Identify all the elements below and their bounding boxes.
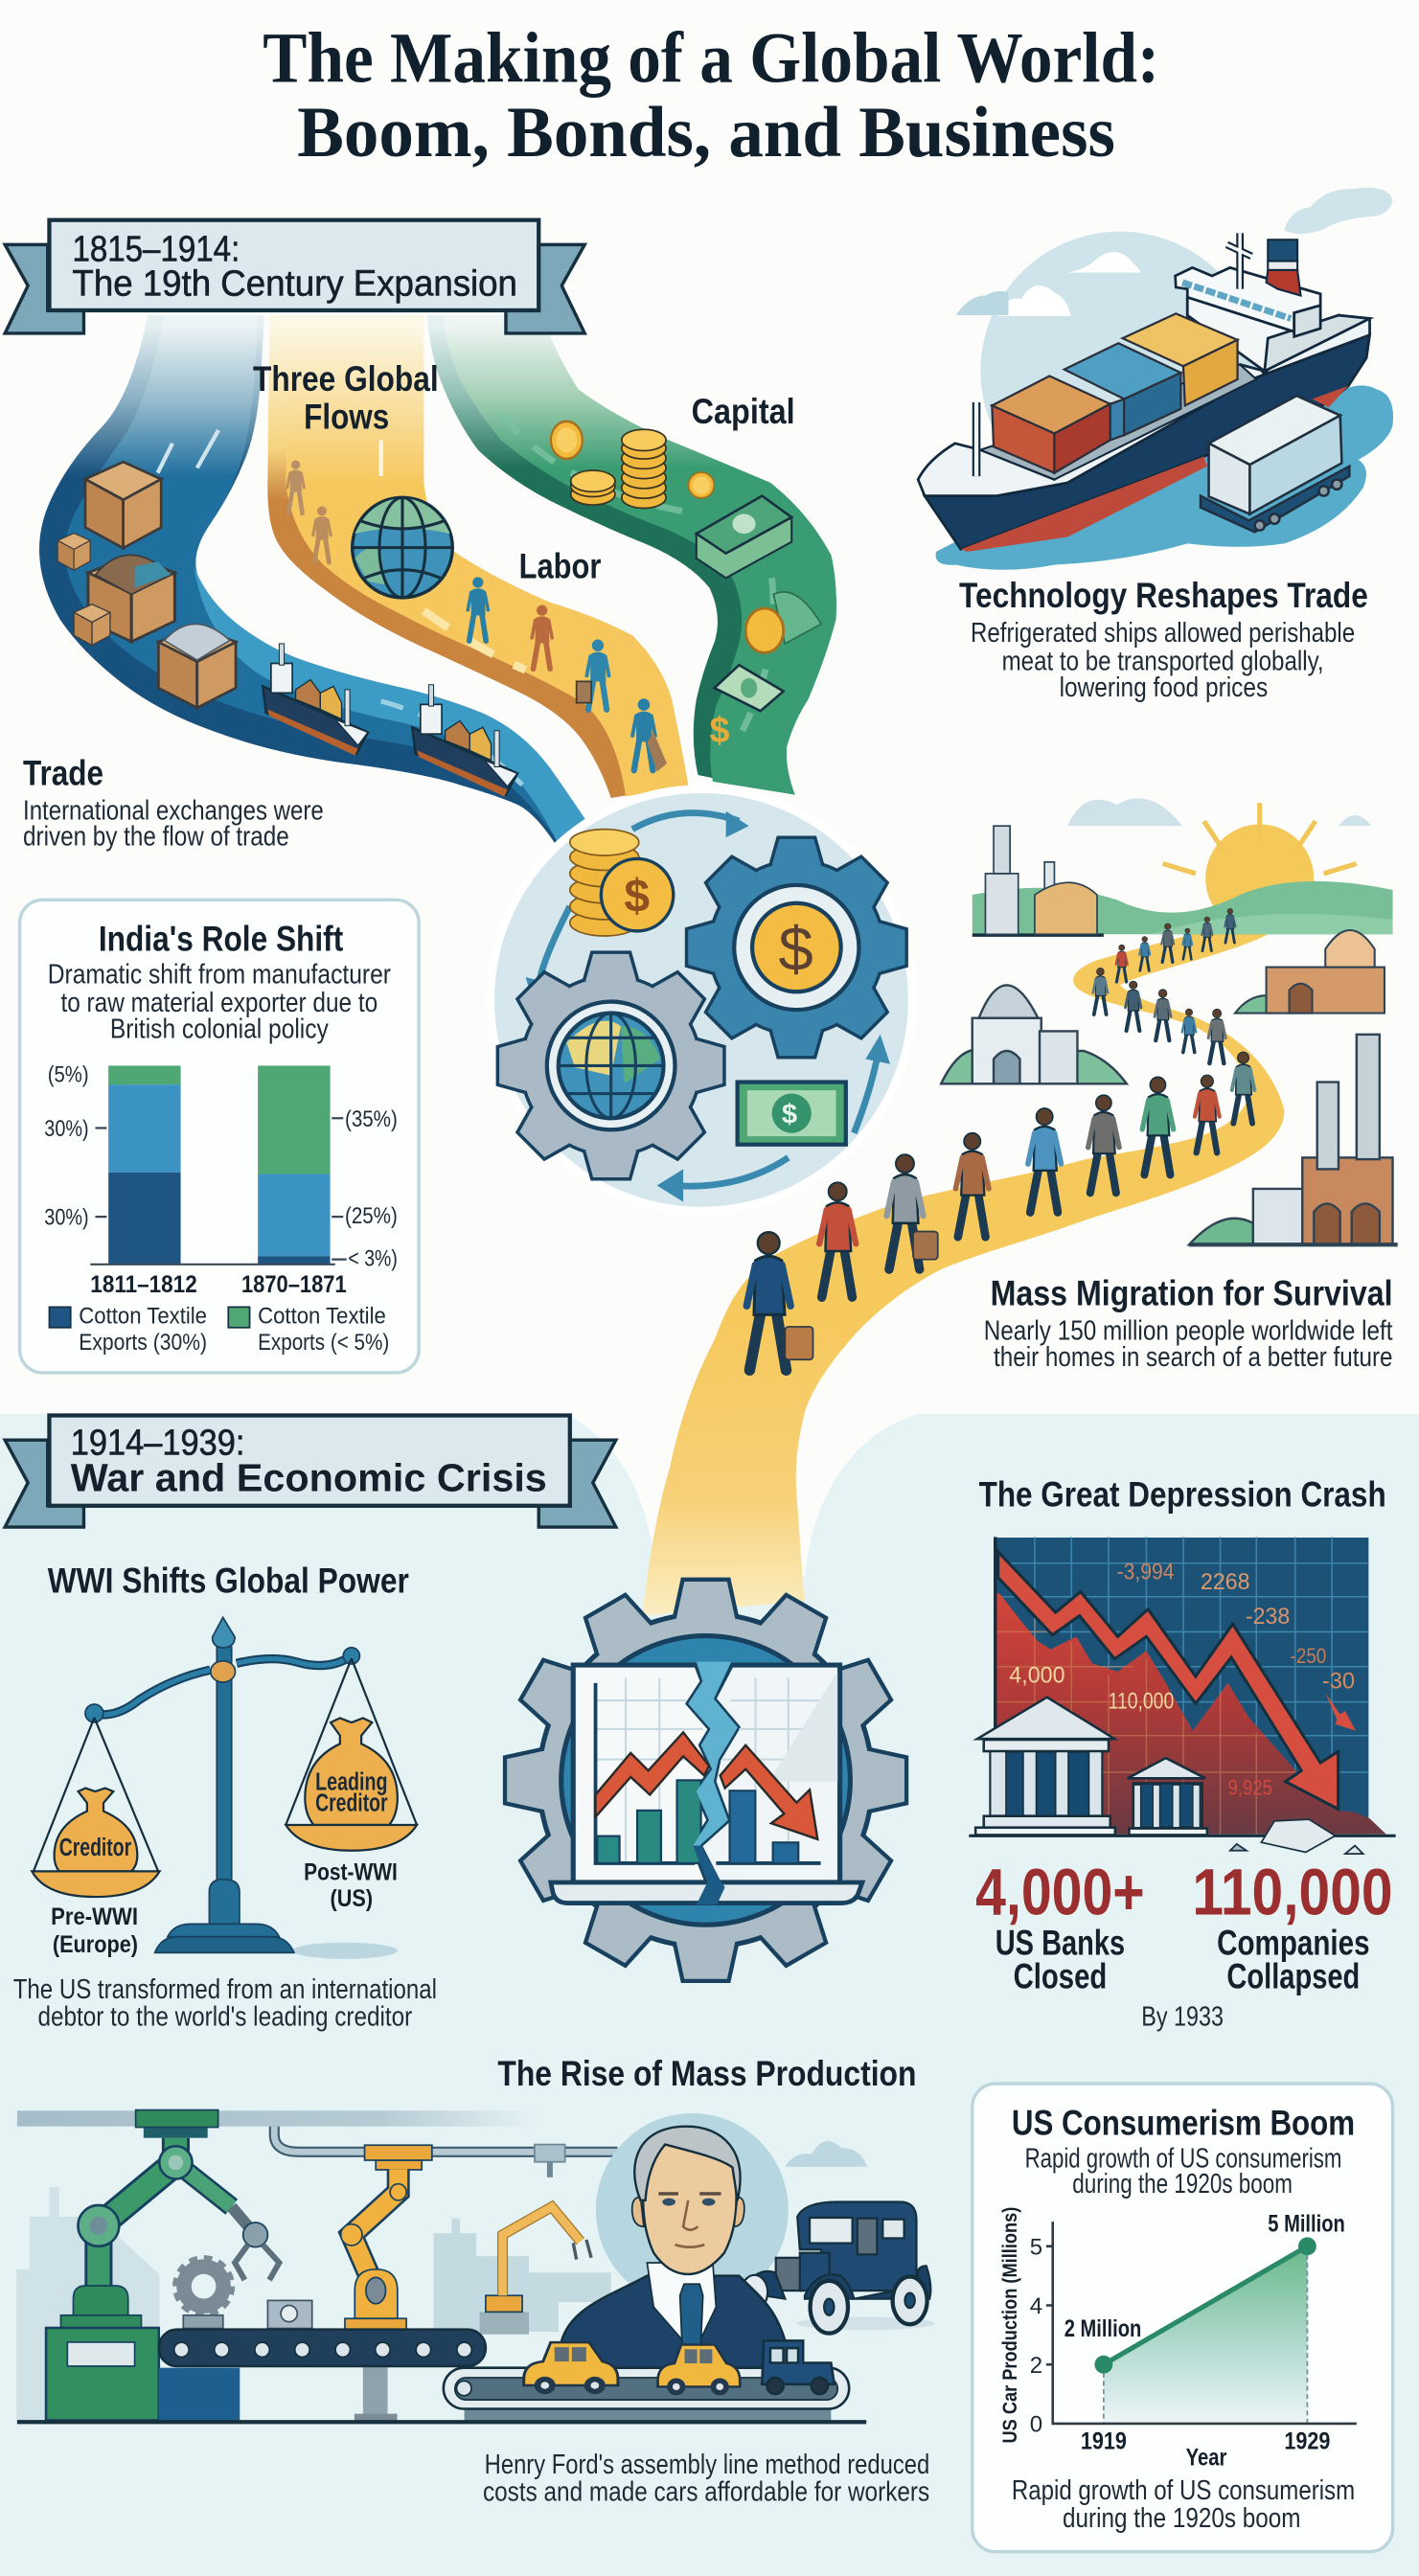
text: technology reshapes trade: lowering food prices xyxy=(1060,672,1268,702)
legend: Cotton Textile xyxy=(79,1304,207,1330)
banner: 1815-1914: 1815–1914: xyxy=(72,229,240,269)
stacked bar 1870-1871 xyxy=(258,1065,331,1265)
illustration: crash chart xyxy=(969,1537,1396,1854)
upper conveyor xyxy=(159,2330,486,2422)
consumerism subtitle: during the 1920s boom xyxy=(1072,2168,1293,2199)
left white mosque xyxy=(941,985,1127,1083)
india description: Dramatic shift from manufacturer xyxy=(48,959,391,990)
label: three global flows: Flows xyxy=(304,397,389,436)
text: Henry Ford description: Henry Ford's assembly line method reduced xyxy=(485,2449,929,2479)
year labels: 1870–1871 xyxy=(241,1272,347,1298)
blue truck xyxy=(762,2340,835,2394)
bar value labels: (25%) xyxy=(345,1203,398,1229)
pan labels: Post-WWI xyxy=(304,1860,398,1886)
coin stack and dollar coin xyxy=(570,830,674,936)
legend: Exports (< 5%) xyxy=(258,1330,389,1356)
illustration: broken gear with chart xyxy=(507,1582,904,1979)
axis labels: 5 xyxy=(1030,2234,1042,2260)
text: Henry Ford description: costs and made cars affordable for workers xyxy=(483,2475,929,2506)
stats: banks and companies: Collapsed xyxy=(1226,1957,1360,1996)
illustration: migration landscape xyxy=(941,798,1398,1244)
bar value labels: (35%) xyxy=(345,1106,398,1132)
yellow cars xyxy=(524,2342,740,2395)
icon: globe on labor flow xyxy=(353,497,452,598)
large migration road xyxy=(642,913,1288,1616)
bar value labels: 30%) xyxy=(44,1205,89,1231)
orange robot arm xyxy=(341,2145,432,2330)
axis labels xyxy=(998,2207,1345,2472)
chart numbers: -250 xyxy=(1291,1644,1326,1668)
text: trade xyxy=(23,753,324,852)
text: technology reshapes trade: meat to be transported globally, xyxy=(1002,645,1324,675)
bar value labels: (5%) xyxy=(48,1062,89,1088)
shelf xyxy=(551,1882,862,1904)
year labels xyxy=(90,1272,347,1298)
leading creditor label: Creditor xyxy=(315,1790,388,1817)
stats: banks and companies: 4,000+ xyxy=(975,1856,1145,1929)
pan labels xyxy=(51,1860,398,1958)
Henry Ford portrait xyxy=(559,2127,789,2369)
stacked bar 1811-1812 xyxy=(108,1065,181,1265)
illustration: balance scale xyxy=(32,1617,417,1959)
vintage car xyxy=(742,2202,934,2334)
coin stack and dollar coin: $ xyxy=(624,871,650,922)
chart numbers xyxy=(1009,1559,1355,1799)
bar value labels xyxy=(44,1062,398,1272)
banner: 1914-1939: War and Economic Crisis xyxy=(71,1455,547,1499)
blue containers xyxy=(1064,343,1180,440)
india description xyxy=(48,959,391,1043)
text: technology reshapes trade xyxy=(959,576,1368,702)
migrants walking xyxy=(746,908,1254,1370)
deck xyxy=(980,365,1256,480)
text: trade: International exchanges were xyxy=(23,794,324,825)
axis labels: 2 Million xyxy=(1064,2316,1141,2342)
text: technology reshapes trade: Refrigerated ships allowed perishable xyxy=(971,617,1355,648)
text: Henry Ford description xyxy=(483,2449,929,2506)
banknote: $ xyxy=(782,1099,797,1129)
gray gear with globe xyxy=(499,954,722,1177)
stats: banks and companies: Closed xyxy=(1014,1957,1107,1996)
small gear part xyxy=(175,2259,312,2329)
crack xyxy=(688,1662,738,1846)
lower conveyor xyxy=(444,2368,849,2421)
text: WWI description xyxy=(13,1973,437,2031)
water xyxy=(936,385,1393,570)
right pan and leading creditor bag xyxy=(286,1718,417,1851)
text: trade: driven by the flow of trade xyxy=(23,821,289,852)
title xyxy=(263,19,1159,172)
bar value labels: < 3%) xyxy=(348,1246,398,1272)
legend: Exports (30%) xyxy=(79,1330,207,1356)
heading: rise of mass production: The Rise of Mass Production xyxy=(497,2054,916,2093)
axis labels: 1929 xyxy=(1284,2429,1330,2455)
text: WWI description: The US transformed from an international xyxy=(13,1973,437,2004)
arrows around gears xyxy=(526,811,890,1202)
blue gear xyxy=(688,839,904,1056)
text: trade: Trade xyxy=(23,753,103,792)
banknote xyxy=(738,1083,846,1145)
banner: 1914-1939: 1914–1939: xyxy=(71,1423,244,1463)
axis labels: Year xyxy=(1186,2446,1227,2472)
heading: WWI shifts global power: WWI Shifts Global Power xyxy=(48,1562,409,1601)
skyline xyxy=(16,2187,159,2421)
consumerism subtitle xyxy=(1025,2143,1341,2199)
axis labels: 1919 xyxy=(1081,2429,1127,2455)
stats: banks and companies: By 1933 xyxy=(1141,2000,1224,2031)
banner: 1914-1939 xyxy=(5,1416,616,1527)
flow: capital green xyxy=(427,315,836,795)
icons: labor walkers xyxy=(287,461,667,772)
icons: coins and money on capital flow xyxy=(551,422,821,750)
illustration: big container ship xyxy=(918,188,1393,570)
hull xyxy=(925,335,1370,549)
chart numbers: -238 xyxy=(1246,1604,1290,1630)
pan labels: (Europe) xyxy=(53,1932,138,1958)
leading creditor label: Leading xyxy=(315,1768,388,1795)
stats: banks and companies: Companies xyxy=(1217,1924,1370,1963)
stats: banks and companies: US Banks xyxy=(996,1924,1125,1963)
label: three global flows: Three Global xyxy=(253,359,439,399)
consumerism subtitle: Rapid growth of US consumerism xyxy=(1025,2143,1341,2174)
line chart xyxy=(998,2207,1357,2472)
leading creditor label xyxy=(315,1768,388,1817)
chart numbers: -30 xyxy=(1322,1669,1355,1695)
icons: small ships xyxy=(263,644,517,796)
blue gear: $ xyxy=(778,914,813,984)
pan labels: (US) xyxy=(331,1886,373,1912)
flow: trade river xyxy=(39,315,607,862)
yellow containers xyxy=(1123,313,1238,405)
icons: coins and money on capital flow: $ xyxy=(710,710,730,750)
title: Boom, Bonds, and Business xyxy=(297,93,1115,172)
legend xyxy=(49,1304,389,1356)
label: three global flows xyxy=(253,359,439,436)
axis labels: 2 xyxy=(1030,2353,1042,2379)
axis labels: 0 xyxy=(1030,2412,1042,2438)
axis labels: 5 Million xyxy=(1268,2211,1345,2237)
year labels: 1811–1812 xyxy=(90,1272,197,1298)
india heading: India's Role Shift xyxy=(99,919,343,958)
consumerism heading: US Consumerism Boom xyxy=(1012,2103,1355,2142)
text: WWI description: debtor to the world's leading creditor xyxy=(37,2000,412,2031)
illustration: assembly line xyxy=(16,2110,934,2422)
text: mass migration xyxy=(984,1274,1393,1372)
chart numbers: 2268 xyxy=(1201,1569,1249,1595)
axis labels: 4 xyxy=(1030,2293,1042,2319)
chart numbers: 9,925 xyxy=(1228,1775,1272,1799)
section background: 1914-1939 xyxy=(0,1414,1419,2576)
pan labels: Pre-WWI xyxy=(51,1904,138,1930)
india description: to raw material exporter due to xyxy=(60,987,378,1017)
banner: 1815-1914: The 19th Century Expansion xyxy=(72,263,517,304)
india description: British colonial policy xyxy=(110,1013,330,1043)
chart numbers: -3,994 xyxy=(1117,1559,1175,1584)
Ford portrait backdrop xyxy=(596,2113,789,2307)
chart numbers: 4,000 xyxy=(1009,1663,1065,1689)
bar value labels: 30%) xyxy=(44,1116,89,1142)
consumerism footer xyxy=(1012,2474,1355,2533)
axis labels: US Car Production (Millions) xyxy=(998,2207,1021,2444)
right mosque xyxy=(1235,930,1385,1014)
flow: labor yellow xyxy=(267,315,688,798)
left pan and creditor bag xyxy=(32,1789,160,1897)
factory xyxy=(1189,1035,1398,1244)
panel: US consumerism boom xyxy=(973,2084,1393,2552)
consumerism footer: during the 1920s boom xyxy=(1063,2502,1301,2533)
funnel xyxy=(1267,239,1301,296)
banner: 1815-1914 xyxy=(5,220,584,333)
creditor label: Creditor xyxy=(59,1835,131,1861)
label: capital: Capital xyxy=(692,392,795,431)
legend: Cotton Textile xyxy=(258,1304,386,1330)
panel: India's role shift xyxy=(20,900,419,1373)
chart numbers: 110,000 xyxy=(1109,1688,1174,1714)
consumerism footer: Rapid growth of US consumerism xyxy=(1012,2474,1355,2505)
icons: trade goods xyxy=(57,462,236,708)
green robot arm xyxy=(46,2110,279,2421)
label: labor: Labor xyxy=(519,546,601,585)
title: The Making of a Global World: xyxy=(263,19,1159,99)
orange containers xyxy=(992,376,1110,473)
central gears circle xyxy=(486,785,916,1215)
bank buildings xyxy=(975,1698,1207,1835)
broken chart panel xyxy=(551,1662,862,1904)
superstructure xyxy=(1176,267,1370,375)
stats: banks and companies xyxy=(975,1856,1393,2031)
refrigerated container xyxy=(1201,396,1349,532)
small yellow robot xyxy=(480,2207,591,2335)
